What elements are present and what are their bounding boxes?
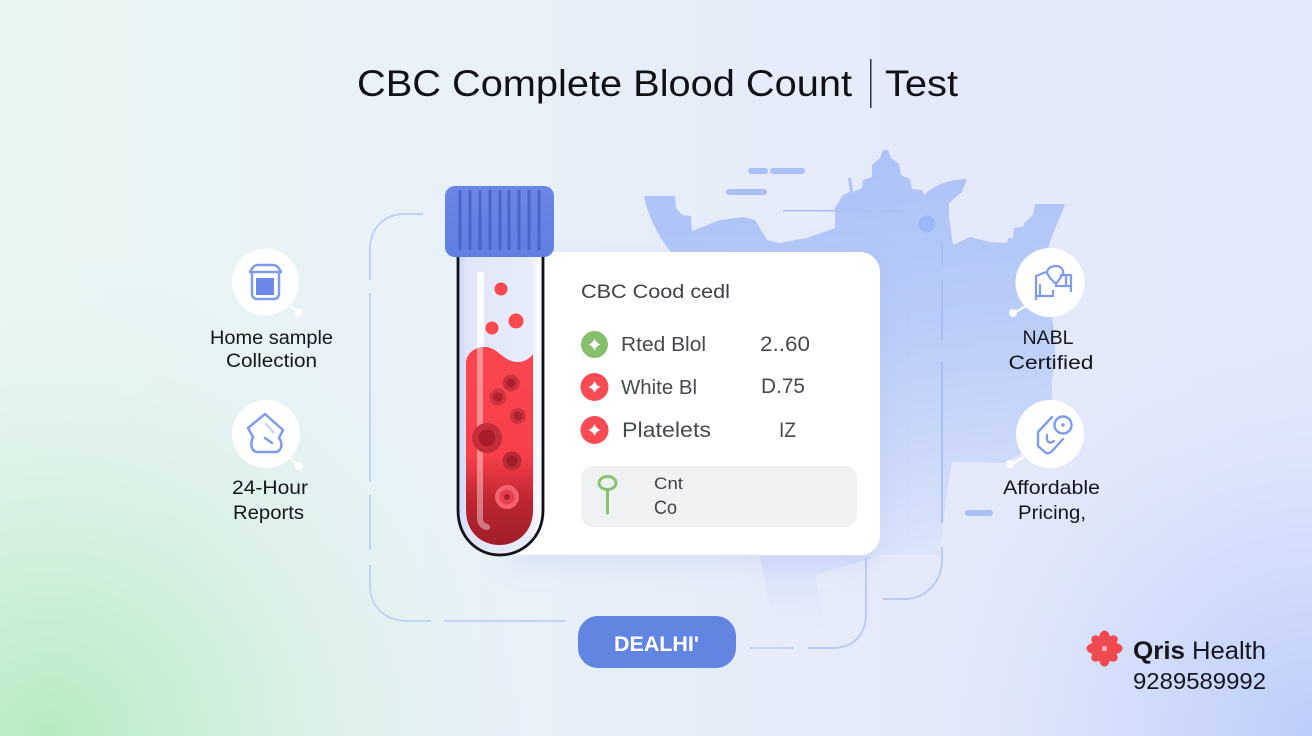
feature: 24-hour reports: 24-Hour <box>232 478 309 499</box>
feature: home sample collection <box>210 248 333 372</box>
card heading: CBC Cood cedl <box>581 281 730 303</box>
blood liquid <box>466 347 533 545</box>
row: white blood: White Bl <box>621 377 697 399</box>
brand block: Qris <box>1133 637 1185 665</box>
feature: NABL certified <box>1008 248 1094 374</box>
row: platelets <box>580 416 796 444</box>
icon: house shield <box>232 400 303 470</box>
brand block <box>1086 630 1266 694</box>
feature: affordable pricing: Pricing, <box>1018 503 1086 524</box>
location button: DEALHI' <box>614 633 699 656</box>
tube cap <box>445 186 554 257</box>
row: platelets: Platelets <box>622 419 711 442</box>
row: red blood: Rted Blol <box>621 334 706 356</box>
feature: 24-hour reports: Reports <box>233 503 304 524</box>
map landmark dot <box>918 216 936 232</box>
brand block: 9289589992 <box>1133 668 1266 694</box>
row: red blood: 2..60 <box>760 333 810 356</box>
faint map area below card <box>760 556 880 630</box>
brand block: Health <box>1192 637 1266 665</box>
connector lines <box>370 214 942 648</box>
tube glass <box>458 250 543 555</box>
location button <box>578 616 736 668</box>
row: white blood <box>580 373 805 401</box>
background map silhouette <box>644 150 1065 630</box>
map dash marks <box>726 168 993 516</box>
blood cells <box>472 345 526 527</box>
feature: NABL certified: NABL <box>1022 328 1074 349</box>
glass highlight over liquid <box>480 345 487 527</box>
icon: sample jar <box>232 248 302 316</box>
note box: Co <box>654 498 677 519</box>
feature: affordable pricing <box>1003 400 1100 524</box>
feature: home sample collection: Collection <box>226 351 317 372</box>
results card <box>510 252 880 555</box>
note box: Cnt <box>654 474 683 493</box>
icon: red flower logo <box>1086 630 1122 666</box>
row: white blood: D.75 <box>761 375 805 398</box>
row: platelets: IZ <box>779 419 796 442</box>
note box <box>581 466 857 527</box>
icon: badge <box>1009 248 1084 317</box>
feature: NABL certified: Certified <box>1008 353 1094 374</box>
title: Test <box>885 63 959 104</box>
floating drops <box>486 282 524 334</box>
glass highlight <box>477 272 484 347</box>
test tube <box>445 186 554 555</box>
row: red blood <box>581 331 810 358</box>
title: CBC Complete Blood Count <box>357 63 853 104</box>
icon: price tag <box>1006 400 1084 468</box>
feature: 24-hour reports <box>232 400 309 524</box>
feature: home sample collection: Home sample <box>210 328 333 349</box>
title <box>357 59 959 108</box>
feature: affordable pricing: Affordable <box>1003 478 1100 499</box>
note icon: pin <box>599 476 616 513</box>
